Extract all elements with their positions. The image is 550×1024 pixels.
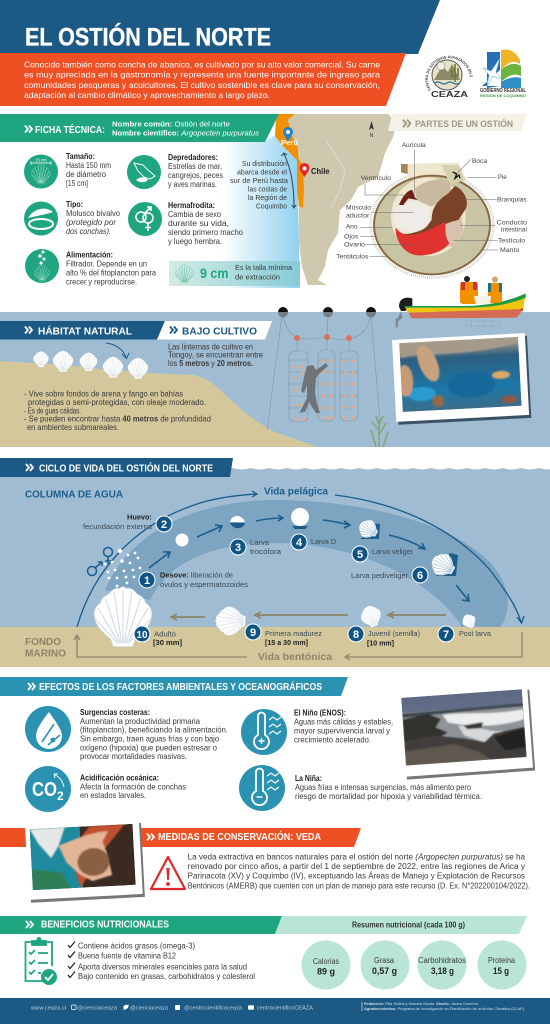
banner: efectos: EFECTOS DE LOS FACTORES AMBIENTALES Y OCEANOGRÁFICOS xyxy=(39,682,322,693)
anatomy labels xyxy=(336,142,527,261)
panel: life cycle xyxy=(0,458,550,667)
icon: CO2 xyxy=(25,766,71,812)
stage labels: fecundación externa xyxy=(83,522,153,531)
text: natural habitat: - Se pueden encontrar hasta 40 metros de profundidad xyxy=(24,415,211,424)
names: Nombre común: Ostión del norte xyxy=(112,120,230,128)
stage numbers: 6 xyxy=(417,570,423,582)
fact: surgencias: Sin embargo, traen aguas frías y con bajo xyxy=(80,735,220,744)
minimum size callout: de extracción xyxy=(235,272,280,282)
text: veda: Bentónicos (AMERB) que cuenten con un plan de manejo para este recurso (D. Ex. N°202200104/2022). xyxy=(188,881,530,890)
panel: nutritional benefits xyxy=(0,916,527,990)
anatomy labels: Ano xyxy=(346,224,358,231)
icon: predators xyxy=(127,155,161,189)
intro text: comunidades pesqueras y acuicultores. El cultivo sostenible es clave para su conservación, xyxy=(24,81,380,90)
label: vida pelágica: Vida pelágica xyxy=(264,486,328,497)
arc band xyxy=(105,500,508,627)
icon: cold thermometer xyxy=(239,765,285,811)
fact: El Niño: mayor supervivencia larval y xyxy=(294,727,390,736)
fact: tamaño xyxy=(66,152,111,188)
anatomy labels: Manto xyxy=(500,247,520,254)
banner: veda: MEDIDAS DE CONSERVACIÓN: VEDA xyxy=(158,831,321,843)
label: fondo marino: MARINO xyxy=(25,649,66,660)
stage labels: Larva pediveliger xyxy=(351,571,409,580)
stage numbers: 1 xyxy=(144,575,150,587)
anatomy labels: Conducto xyxy=(497,220,527,227)
label: fondo marino xyxy=(25,637,66,660)
heading: partes de un ostión: PARTES DE UN OSTIÓN xyxy=(415,118,513,130)
checklist text: Contiene ácidos grasos (omega-3) xyxy=(78,942,195,951)
minimum size callout xyxy=(176,263,293,283)
pin: Perú xyxy=(281,127,298,147)
stage labels: óvulos y espermatozoides xyxy=(160,580,248,589)
text: natural habitat: en ambientes submareales. xyxy=(27,423,119,432)
stage labels: Post larva xyxy=(459,629,492,638)
fact: surgencias: (fitoplancton), beneficiando la alimentación. xyxy=(80,726,228,735)
fact: La Niña xyxy=(295,774,482,801)
minimum size callout: Es la talla mínima xyxy=(235,263,293,272)
credits: Redacción: Pilar Molina y Marcela Zavala. Diseño: Janina Guerrero. xyxy=(364,1001,479,1006)
fact: La Niña: riesgo de mortalidad por hipoxia y variabilidad térmica. xyxy=(295,792,482,801)
text: natural habitat: - Vive sobre fondos de arena y fango en bahías xyxy=(24,390,183,399)
anatomy labels: Testículo xyxy=(498,238,525,245)
intro text: es muy apreciada en la gastronomía y representa una fuente importante de ingreso para xyxy=(24,71,380,80)
stat: proteína: 15 g xyxy=(493,966,509,977)
stat: calorías: Calorías xyxy=(313,957,339,966)
icon: size xyxy=(24,154,58,188)
fact: acidificación: en estados larvales. xyxy=(80,791,146,800)
stage numbers: 10 xyxy=(136,630,148,641)
fact: tipo: (protegido por xyxy=(66,218,116,227)
stage labels: trocófora xyxy=(250,547,282,556)
heading: partes de un ostión xyxy=(388,114,527,131)
fact: tamaño: de diámetro xyxy=(66,170,107,179)
pin: Chile: Chile xyxy=(311,166,330,176)
fact: depredadores: Depredadores: xyxy=(168,153,218,162)
icon: checklist xyxy=(26,937,57,985)
panel: environmental effects xyxy=(0,677,535,812)
names xyxy=(112,120,259,138)
stage labels: [30 mm] xyxy=(153,638,183,647)
anatomy labels: aductor xyxy=(346,212,370,220)
fact: surgencias xyxy=(80,708,228,761)
fisher right xyxy=(474,276,502,305)
anatomy labels: Boca xyxy=(472,158,487,165)
icon: north: N xyxy=(370,133,374,139)
stat: calorías: 89 g xyxy=(317,967,335,978)
fact: acidificación xyxy=(80,774,186,800)
anatomy labels: Aurícula xyxy=(402,142,426,149)
stage numbers: 8 xyxy=(353,629,359,641)
social links: centrocientificoCEAZA xyxy=(257,1006,313,1012)
icon: bivalve xyxy=(24,202,58,236)
fact: alimentación: crecer y reproducirse. xyxy=(66,278,137,287)
distribution text: abarca desde el xyxy=(237,168,287,176)
banner: hábitat natural xyxy=(0,321,165,340)
icon: filter feeding xyxy=(25,249,59,283)
social links: @cienciaceaza xyxy=(130,1006,169,1012)
credits xyxy=(362,1001,525,1011)
arrow: to shells xyxy=(106,343,129,358)
arrow: benthic xyxy=(74,632,522,660)
stat: proteína: Proteína xyxy=(488,956,516,965)
anatomy labels: Ovario xyxy=(344,242,365,249)
sand seabed xyxy=(0,361,318,447)
banner: bajo cultivo: BAJO CULTIVO xyxy=(182,325,257,337)
text: cultivo: los 5 metros y 20 metros. xyxy=(168,359,253,368)
fact: alimentación xyxy=(66,250,157,287)
text: natural habitat xyxy=(24,390,211,432)
fact: tipo: Molusco bivalvo xyxy=(66,209,121,218)
icon: warm thermometer xyxy=(241,709,287,755)
stage numbers: 5 xyxy=(357,549,363,561)
footer xyxy=(0,998,550,1024)
text: veda xyxy=(188,852,530,890)
arrows: benthic stage sequence xyxy=(171,612,446,620)
panel: ficha icons and facts xyxy=(24,152,244,287)
distribution text: las costas de xyxy=(248,184,287,194)
fact: tipo: Tipo: xyxy=(66,200,83,209)
photo: rocky coast xyxy=(399,687,535,780)
fact: depredadores: Estrellas de mar, xyxy=(168,162,222,171)
intro text xyxy=(24,60,380,100)
diver xyxy=(297,363,328,413)
fact: El Niño: crecimiento acelerado. xyxy=(294,736,371,744)
stage labels: Desove: liberación de xyxy=(160,571,233,580)
logo: Gobierno Regional: REGIÓN DE COQUIMBO xyxy=(480,93,526,98)
fact: La Niña: Aguas frías e intensas surgencias, más alimento pero xyxy=(295,783,472,792)
anatomy labels: intestinal xyxy=(501,227,527,234)
benthic shells xyxy=(94,587,478,647)
banner: beneficios: BENEFICIOS NUTRICIONALES xyxy=(41,919,169,930)
arrow: pelagic down xyxy=(335,495,524,623)
anatomy labels: Ventrículo xyxy=(361,175,391,182)
panel: conservation xyxy=(0,820,530,903)
fact: acidificación: Acidificación oceánica: xyxy=(80,774,159,783)
label: columna de agua: COLUMNA DE AGUA xyxy=(25,490,123,501)
pin: Chile xyxy=(300,163,330,177)
fact: tamaño: Hasta 150 mm xyxy=(66,161,111,170)
text: cultivo: Las linternas de cultivo en xyxy=(168,342,253,352)
logo: CEAZA: CEAZA xyxy=(431,90,468,99)
fact: alimentación: alto % del fitoplancton para xyxy=(66,269,157,278)
stat: proteína xyxy=(478,940,526,990)
stat: carbohidratos: 3,18 g xyxy=(431,966,454,977)
logo: Gobierno Regional xyxy=(480,49,527,98)
anatomy labels: Pie xyxy=(498,174,507,181)
names: Nombre científico: Argopecten purpuratus xyxy=(112,129,259,138)
distribution text: Su distribución xyxy=(242,159,287,168)
arrows: larval sequence xyxy=(149,515,469,601)
buoys xyxy=(278,307,376,318)
text: veda: Parinacota (XV) y Coquimbo (IV), exceptuando las Áreas de Manejo y Explotación de Recursos xyxy=(188,872,525,881)
banner: ficha técnica xyxy=(0,114,279,142)
stage numbers: 9 xyxy=(250,627,256,639)
checklist text xyxy=(68,942,255,981)
stage labels: Juvenil (semilla) xyxy=(368,629,420,638)
seaweed xyxy=(371,416,388,447)
icon: north xyxy=(369,121,374,139)
checklist text: Buena fuente de vitamina B12 xyxy=(78,952,177,961)
fact: tipo: dos conchas). xyxy=(66,227,111,236)
banner: veda xyxy=(0,828,361,847)
fact: hermafrodita: y luego hembra. xyxy=(168,237,222,246)
stage labels: [10 mm] xyxy=(367,639,395,648)
credits: Agradecimientos: Programa de Investigación en Planificación de la Acción Climática (CLAP). xyxy=(364,1006,525,1011)
larval stages xyxy=(176,508,459,581)
stage labels: Adulto xyxy=(154,630,176,639)
anatomy labels: Ojos xyxy=(344,234,359,241)
banner: resumen nutricional xyxy=(275,916,527,934)
social links: @centrocientificoceaza xyxy=(184,1006,243,1012)
seabed band xyxy=(0,627,550,667)
icon: upwelling xyxy=(25,706,71,752)
stage labels: Larva xyxy=(250,538,270,547)
stage labels: Primera madurez xyxy=(265,629,322,638)
fact: hermafrodita: durante su vida, xyxy=(168,219,229,228)
banner: ciclo de vida xyxy=(0,458,233,477)
distribution text: Coquimbo xyxy=(256,202,287,210)
stage labels: [15 a 30 mm] xyxy=(265,638,309,647)
text: veda: La veda extractiva en bancos naturales para el ostión del norte (Argopecten purpuratus) se ha xyxy=(188,852,526,861)
arrow: range xyxy=(282,153,296,208)
pin: Perú: Perú xyxy=(281,140,298,147)
icon: CO2: 2 xyxy=(57,789,64,803)
text: natural habitat: - Es de guas cálidas. xyxy=(24,406,81,415)
icon: hermaphrodite xyxy=(128,202,162,236)
anatomy labels: Tentáculos xyxy=(336,254,369,261)
header: title banner xyxy=(0,0,440,54)
fact: acidificación: Afecta la formación de conchas xyxy=(80,783,186,792)
banner: hábitat natural: HÁBITAT NATURAL xyxy=(38,324,133,337)
text: cultivo: Tongoy, se encuentran entre xyxy=(168,351,263,360)
label: vida bentónica: Vida bentónica xyxy=(258,652,332,663)
text: veda: renovado por cinco años, a partir del 1 de septiembre de 2022, entre las regiones de Arica y xyxy=(188,862,525,871)
stat: grasa: 0,57 g xyxy=(372,966,397,977)
stage numbers xyxy=(134,516,454,642)
social links: www.ceaza.cl xyxy=(30,1006,66,1012)
banner: ciclo de vida: CICLO DE VIDA DEL OSTIÓN DEL NORTE xyxy=(39,463,213,475)
diagram: scallop anatomy xyxy=(336,142,527,278)
stat: grasa xyxy=(360,940,410,990)
stage numbers: 7 xyxy=(443,629,449,641)
banner: bajo cultivo xyxy=(157,321,272,340)
checklist text: Aporta diversos minerales esenciales para la salud xyxy=(78,962,247,971)
icon: CO2: CO xyxy=(32,779,57,801)
fact: El Niño: El Niño (ENOS): xyxy=(294,709,346,718)
gametes xyxy=(104,549,141,587)
fact: El Niño xyxy=(294,709,393,744)
logo: Gobierno Regional: GOBIERNO REGIONAL xyxy=(480,88,527,94)
banner: resumen nutricional: Resumen nutricional (cada 100 g) xyxy=(352,920,465,929)
stage labels: Huevo: xyxy=(127,513,152,522)
stage labels: Larva D xyxy=(311,537,336,546)
boat with fishers xyxy=(396,276,526,327)
fact: surgencias: Aumentan la productividad primaria xyxy=(80,717,201,726)
fisher left xyxy=(460,276,478,304)
photo: scallop in hand xyxy=(25,820,145,903)
distribution text: sur de Perú hasta xyxy=(230,176,289,185)
intro text: Conocido también como concha de abanico, es cultivado por su alto valor comercial. Su carne xyxy=(24,60,380,70)
intro panel xyxy=(0,53,406,106)
stat: calorías xyxy=(302,940,350,990)
gender symbols xyxy=(88,548,112,576)
fact: hermafrodita: Hermafrodita: xyxy=(168,201,215,210)
fact: tamaño: Tamaño: xyxy=(66,152,95,161)
stage labels: Larva veliger xyxy=(372,547,414,556)
label: fondo marino: FONDO xyxy=(25,637,61,648)
stage numbers: 2 xyxy=(161,519,167,531)
stage labels xyxy=(83,513,492,648)
banner: efectos xyxy=(0,677,348,696)
fact: alimentación: Filtrador. Depende en un xyxy=(66,260,147,269)
fact: tipo xyxy=(66,200,121,236)
fact: hermafrodita: Cambia de sexo xyxy=(168,210,222,219)
fact: alimentación: Alimentación: xyxy=(66,250,113,260)
fact: hermafrodita: siendo primero macho xyxy=(168,228,244,237)
social links xyxy=(30,1004,313,1012)
distribution text: la Región de xyxy=(248,193,287,202)
icon: warning xyxy=(151,857,185,889)
arrow: pelagic up xyxy=(77,491,257,627)
fact: tamaño: [15 cm] xyxy=(66,179,88,188)
logo: CEAZA xyxy=(425,56,472,99)
minimum size callout: 9 cm xyxy=(200,265,228,281)
shells on seabed xyxy=(33,351,148,379)
fact: El Niño: Aguas más cálidas y estables, xyxy=(294,718,393,727)
stage numbers: 3 xyxy=(235,542,241,554)
anatomy labels: Branquias xyxy=(497,197,527,204)
map: South America distribution xyxy=(169,114,397,288)
stat: carbohidratos xyxy=(418,940,466,990)
stat: carbohidratos: Carbohidratos xyxy=(418,956,466,965)
intro text: adaptación al cambio climático y aprovechamiento a largo plazo. xyxy=(24,91,270,100)
text: natural habitat: protegidas o semi-protegidas, con oleaje moderado. xyxy=(28,398,206,407)
social links: @cienciaceaza xyxy=(77,1006,118,1012)
cultivation lanterns xyxy=(267,316,380,430)
panel: habitat xyxy=(0,307,550,447)
fact: depredadores: cangrejos, peces xyxy=(168,171,223,180)
stat: grasa: Grasa xyxy=(374,956,395,965)
title: EL OSTIÓN DEL NORTE xyxy=(25,22,271,52)
distribution text xyxy=(230,159,289,210)
fact: La Niña: La Niña: xyxy=(295,774,322,783)
checklist text: Bajo contenido en grasas, carbohidratos y colesterol xyxy=(78,972,255,981)
fact: surgencias: provocar mortalidades masivas. xyxy=(80,752,187,761)
fact: depredadores xyxy=(168,153,223,189)
banner: beneficios xyxy=(0,916,282,934)
anatomy labels: Músculo xyxy=(346,204,371,212)
photo: underwater scallops xyxy=(392,333,531,425)
fact: hermafrodita xyxy=(168,201,244,246)
fact: surgencias: oxígeno (hipoxia) que pueden estresar o xyxy=(80,744,218,752)
heading: ficha técnica: FICHA TÉCNICA: xyxy=(35,123,105,136)
fact: surgencias: Surgencias costeras: xyxy=(80,708,150,717)
fact: depredadores: y aves marinas. xyxy=(168,180,217,189)
stage numbers: 4 xyxy=(296,537,303,549)
text: cultivo xyxy=(168,342,263,368)
icon: size: 15 cm xyxy=(35,158,47,162)
